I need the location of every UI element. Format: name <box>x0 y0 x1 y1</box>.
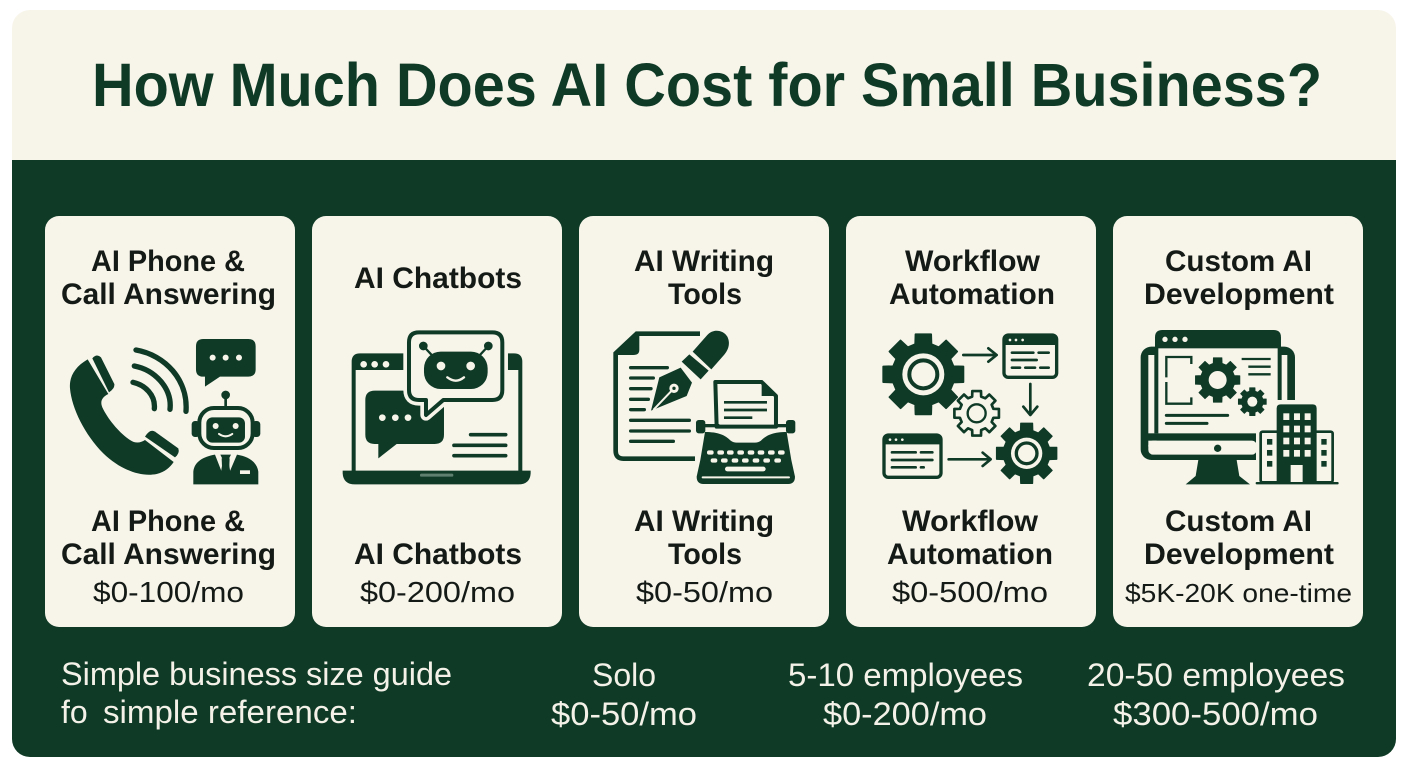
heading: AI Writing Tools repeated: AI Writing <box>634 505 774 538</box>
size tier: solo <box>551 657 697 732</box>
heading: Workflow Automation: Automation <box>889 278 1055 311</box>
heading: Custom AI Development: Development <box>1144 278 1334 311</box>
heading: Custom AI Development repeated: Custom AI <box>1165 505 1312 538</box>
heading: AI Phone and Call Answering: Call Answering <box>61 278 276 311</box>
price: $0-500/mo <box>892 577 1048 609</box>
size tier: 5-10 employees: 5-10 employees <box>788 657 1023 693</box>
size tier: 20-50 employees <box>1087 657 1345 732</box>
panel: AI writing tools <box>579 216 829 627</box>
size tier: 20-50 employees: 20-50 employees <box>1087 657 1345 693</box>
heading: AI Writing Tools repeated <box>634 505 774 571</box>
business size guide label: fo <box>61 694 88 730</box>
size tier: solo: Solo <box>592 657 656 693</box>
icon: monitor with gears and office building <box>1141 330 1339 484</box>
size tier: 20-50 employees: $300-500/mo <box>1113 696 1318 732</box>
panel: workflow automation <box>846 216 1096 627</box>
panel: AI chatbots <box>312 216 562 627</box>
price: $0-100/mo <box>93 577 244 609</box>
size tier: 5-10 employees: $0-200/mo <box>823 696 987 732</box>
panel: custom AI development <box>1113 216 1363 627</box>
heading: AI Phone and Call Answering repeated: Call Answering <box>61 538 276 571</box>
heading: Custom AI Development <box>1144 245 1334 311</box>
heading: AI Phone and Call Answering repeated: AI Phone & <box>91 505 245 538</box>
heading: AI Writing Tools: AI Writing <box>634 245 774 278</box>
icon: laptop with chat bubbles <box>343 332 531 484</box>
price: $5K-20K one-time <box>1125 578 1352 608</box>
business size guide label: simple reference: <box>103 694 357 730</box>
size tier: 5-10 employees <box>788 657 1023 732</box>
price: $0-200/mo <box>360 577 515 609</box>
heading: AI Phone and Call Answering: AI Phone & <box>91 245 245 278</box>
icon: gears and process windows <box>883 334 1057 483</box>
size tier: solo: $0-50/mo <box>551 696 697 732</box>
heading: AI Phone and Call Answering <box>61 245 276 311</box>
heading: Workflow Automation repeated <box>887 505 1053 571</box>
panel: AI phone and call answering <box>45 216 295 627</box>
heading: Custom AI Development repeated <box>1144 505 1334 571</box>
dark background panel <box>12 160 1396 757</box>
heading: Workflow Automation repeated: Automation <box>887 538 1053 571</box>
heading: Custom AI Development repeated: Development <box>1144 538 1334 571</box>
heading: Workflow Automation <box>889 245 1055 311</box>
heading: AI Chatbots repeated: AI Chatbots <box>354 538 522 571</box>
heading: AI Chatbots: AI Chatbots <box>354 262 522 295</box>
price: $0-50/mo <box>636 577 773 609</box>
heading: AI Writing Tools repeated: Tools <box>668 538 742 571</box>
title: How Much Does AI Cost for Small Business? <box>92 51 1322 119</box>
icon: document, pen and typewriter <box>616 331 795 484</box>
business size guide label: Simple business size guide <box>61 656 452 692</box>
heading: AI Writing Tools <box>634 245 774 311</box>
heading: Workflow Automation: Workflow <box>905 245 1041 278</box>
heading: AI Phone and Call Answering repeated <box>61 505 276 571</box>
business size guide label <box>61 656 452 730</box>
heading: Workflow Automation repeated: Workflow <box>902 505 1039 538</box>
heading: AI Writing Tools: Tools <box>668 278 742 311</box>
heading: Custom AI Development: Custom AI <box>1165 245 1312 278</box>
icon: phone with robot <box>70 339 260 484</box>
